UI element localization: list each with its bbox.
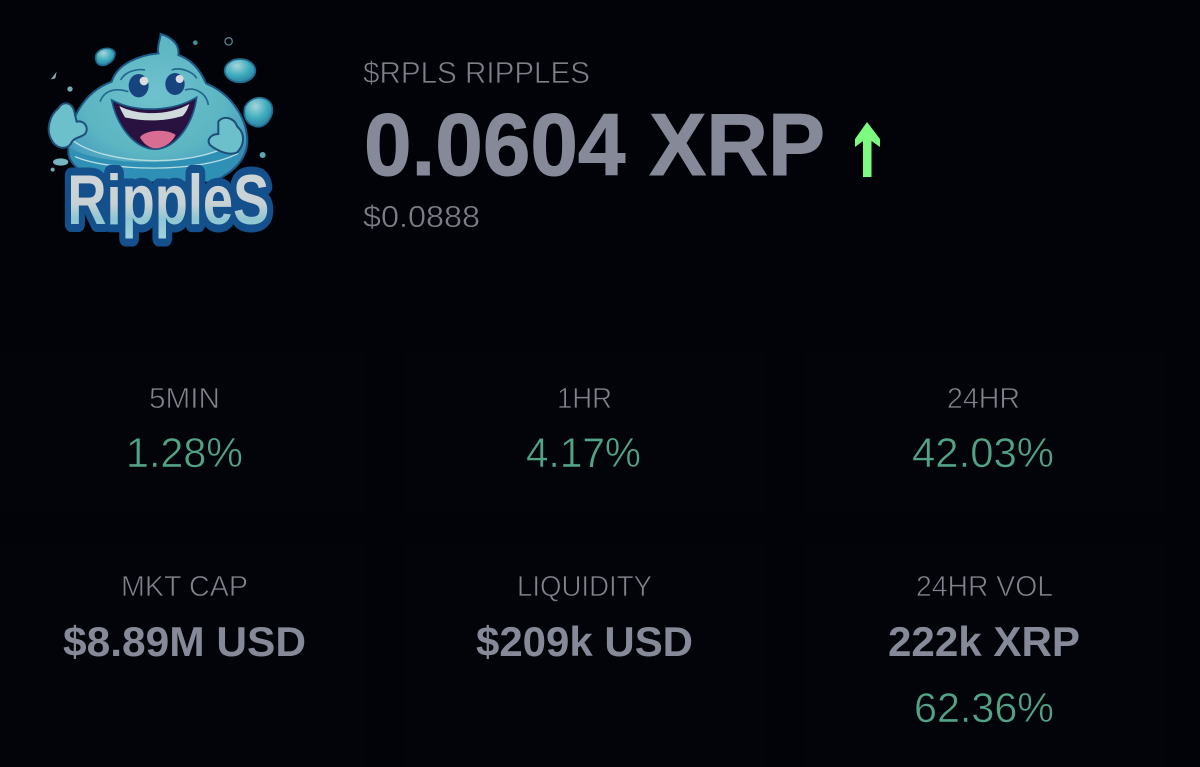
panel: liquidity: $209k USD	[476, 618, 693, 665]
panel: 24hr change: 42.03%	[912, 429, 1054, 476]
right hand	[209, 118, 243, 154]
panel: 24hr change: 24HR	[947, 383, 1020, 415]
panel: 24hr volume: 24HR VOL	[916, 571, 1053, 603]
main price: 0.0604 XRP	[364, 95, 825, 194]
eyes	[129, 73, 185, 97]
panel: 24hr volume	[805, 542, 1165, 767]
panel: market cap: $8.89M USD	[63, 618, 306, 665]
icon: up arrow	[855, 122, 880, 177]
water rim	[70, 137, 243, 168]
panel: 5min change: 5MIN	[149, 383, 220, 415]
ticker name: $RPLS RIPPLES	[363, 55, 590, 90]
panel: 1hr change: 4.17%	[526, 429, 641, 476]
panel: 5min change	[0, 352, 365, 512]
panel: liquidity	[405, 542, 765, 767]
mouth	[112, 97, 197, 149]
bubbles	[51, 38, 272, 172]
panel: market cap: MKT CAP	[121, 571, 248, 603]
panel: 24hr volume: 222k XRP	[888, 618, 1080, 665]
panel: liquidity: LIQUIDITY	[517, 571, 652, 603]
panel: 5min change: 1.28%	[126, 429, 243, 476]
panel: 24hr volume: 62.36%	[914, 684, 1054, 731]
eyebrows and cheeks	[100, 69, 208, 105]
usd price: $0.0888	[363, 199, 480, 234]
panel: 1hr change	[405, 352, 765, 512]
logo wordmark: RippleS	[67, 160, 269, 239]
panel: market cap	[0, 542, 365, 767]
water band	[70, 138, 243, 182]
panel: 24hr change	[805, 352, 1165, 512]
panel: 1hr change: 1HR	[557, 383, 612, 415]
left hand	[49, 103, 87, 148]
mascot body	[68, 34, 247, 180]
logo: Ripples mascot	[49, 34, 272, 239]
